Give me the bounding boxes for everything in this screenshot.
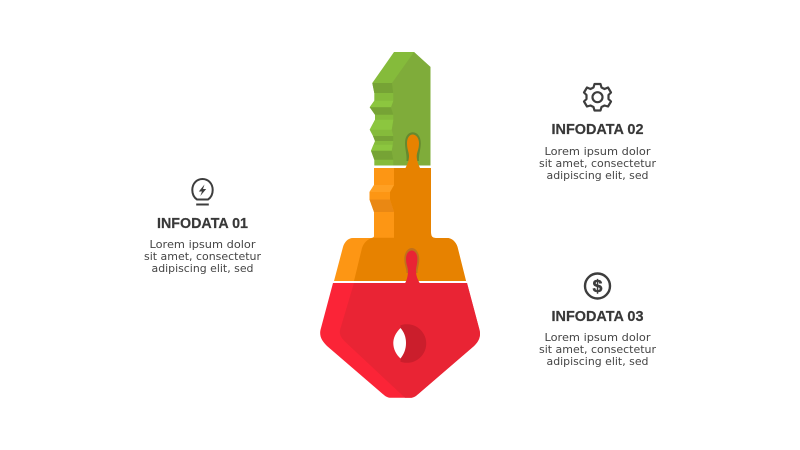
keyhole tab: red into orange (405, 250, 420, 284)
key segment: orange shaft and shoulder (334, 134, 466, 281)
description: adipiscing elit, sed (546, 355, 648, 368)
heading: INFODATA 03 (552, 309, 644, 325)
heading: INFODATA 02 (552, 122, 644, 138)
heading: INFODATA 01 (157, 216, 248, 232)
description (539, 145, 656, 182)
block: infodata 03 (539, 274, 656, 368)
icon: light bulb with bolt (192, 179, 213, 204)
description: adipiscing elit, sed (546, 169, 648, 182)
keyhole tab: orange into green (406, 134, 420, 168)
key segment: red bow (320, 250, 480, 398)
description: Lorem ipsum dolor (544, 145, 651, 158)
icon: gear (584, 84, 611, 110)
icon: dollar coin: $ (593, 276, 603, 296)
description: sit amet, consectetur (144, 250, 261, 263)
description: sit amet, consectetur (539, 157, 656, 170)
description: sit amet, consectetur (539, 343, 656, 356)
description (539, 331, 656, 368)
description: Lorem ipsum dolor (544, 331, 651, 344)
key hole (393, 324, 426, 363)
description (144, 238, 261, 275)
block: infodata 02 (539, 84, 656, 182)
description: adipiscing elit, sed (152, 262, 254, 275)
description: Lorem ipsum dolor (150, 238, 256, 251)
key illustration (320, 52, 480, 398)
key segment: green blade (370, 52, 430, 166)
block: infodata 01 (144, 179, 261, 275)
